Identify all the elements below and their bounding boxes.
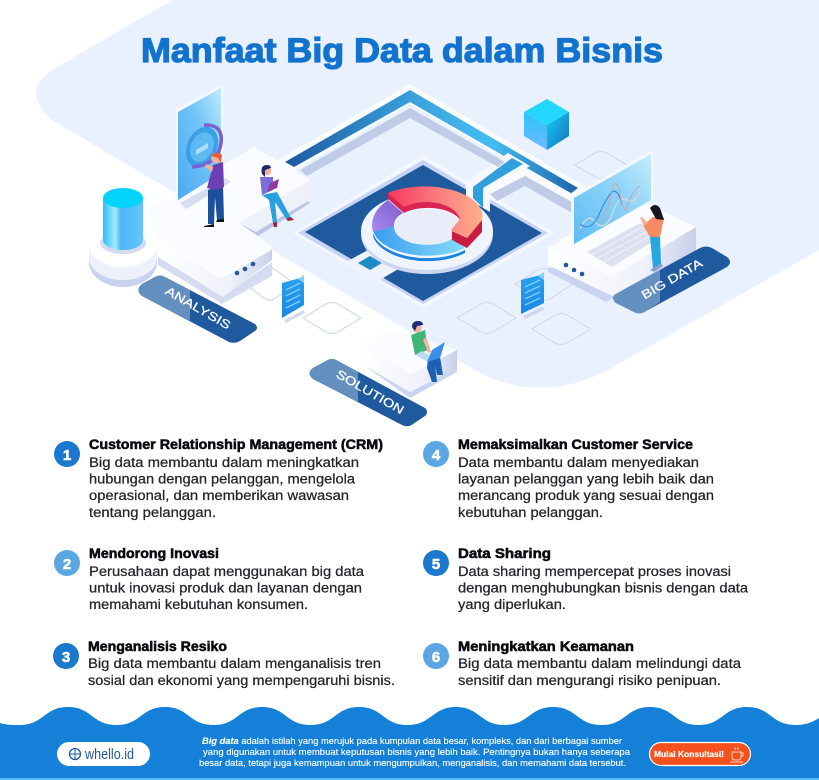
benefit 4 [423,436,714,520]
number badge 3 [53,643,79,669]
number badge 4: 4 [432,447,441,464]
benefit 3 text: Menganalisis Resiko [88,638,227,654]
isometric illustration [89,84,730,426]
label: big data: BIG DATA [639,256,705,302]
number badge 4 [423,441,449,467]
clipboard right [521,272,544,319]
benefit 2 text [89,545,365,612]
cube [524,99,569,150]
benefit 1 text [89,436,383,520]
footer description: besar data, tetapi juga kemampuan untuk mengumpulkan, menganalisis, dan memahami data tersebut. [199,758,626,768]
benefit 2 text: untuk inovasi produk dan layanan dengan [89,580,362,596]
benefit 4 text: Data membantu dalam menyediakan [458,455,699,470]
cylinder pedestal [89,188,157,287]
number badge 1 [54,441,80,467]
benefit 6 text [458,638,742,688]
benefit 3 text: sosial dan ekonomi yang mempengaruhi bisnis. [88,673,395,688]
benefit 4 text: layanan pelanggan yang lebih baik dan [458,472,714,486]
number badge 6: 6 [432,649,440,666]
left platform [147,147,310,304]
person seated with book [260,165,294,227]
number badge 1: 1 [63,447,71,464]
benefit 3 text [88,638,395,688]
benefit 6 text: Meningkatkan Keamanan [458,638,634,654]
number badge 2 [54,550,80,576]
benefit 5 [423,545,749,612]
holographic phone panel [176,85,231,209]
footer description: Big data adalah istilah yang merujuk pada kumpulan data besar, kompleks, dan dari berbagai sumber [202,736,622,746]
benefit 4 text: merancang produk yang sesuai dengan [458,488,714,503]
person standing with purple shirt [204,153,224,227]
laptop screen with chart [571,150,653,247]
footer description [199,736,630,768]
benefit 5 text: Data Sharing [458,545,551,561]
benefit 1 text: hubungan dengan pelanggan, mengelola [89,472,356,486]
label: solution [310,359,427,426]
benefit 6 text: sensitif dan mengurangi risiko penipuan. [458,673,721,688]
label: analysis: ANALYSIS [163,284,233,332]
benefit 2 text: Perusahaan dapat menggunakan big data [89,564,365,579]
benefit 1 text: operasional, dan memberikan wawasan [89,488,349,503]
footer [0,707,819,780]
background diamond panel [36,0,819,388]
number badge 5: 5 [432,556,440,573]
central dark blue diamond [293,155,555,308]
benefit 3 text: Big data membantu dalam menganalisis tren [88,656,381,671]
outline tiles [245,152,627,344]
number badge 5 [423,550,449,576]
benefit 5 text: dengan menghubungkan bisnis dengan data [458,580,749,596]
right laptop platform [548,195,696,302]
label: solution: SOLUTION [334,367,406,417]
label: analysis [138,276,257,343]
consult button: Mulai Konsultasi! [654,749,724,759]
benefit 1 text: Big data membantu dalam meningkatkan [89,455,359,470]
benefit 3 [53,638,395,688]
number badge 2: 2 [63,556,71,573]
benefit 1 text: tentang pelanggan. [89,505,216,520]
benefit 2 [54,545,365,612]
label: big data [613,246,730,313]
whello logo pill [57,742,150,766]
footer description: yang digunakan untuk membuat keputusan bisnis yang lebih baik. Pentingnya bukan hanya seberapa [203,747,630,757]
consult button [650,742,750,766]
solution platform [362,330,457,398]
title: Manfaat Big Data dalam Bisnis [141,32,663,70]
benefit 1 [54,436,383,520]
woman at laptop [640,205,664,272]
donut chart [361,186,493,274]
whello logo pill: whello.id [84,746,134,763]
wavy blue band [0,707,819,778]
circuit pipes [278,84,586,213]
benefit 4 text [458,436,714,520]
benefit 5 text [458,545,749,612]
benefit 2 text: Mendorong Inovasi [89,545,219,561]
benefit 5 text: yang diperlukan. [458,597,566,612]
benefit 4 text: kebutuhan pelanggan. [458,505,603,520]
benefit 4 text: Memaksimalkan Customer Service [458,436,693,452]
number badge 6 [423,643,449,669]
person with laptop [411,321,445,382]
benefit 1 text: Customer Relationship Management (CRM) [89,436,383,452]
clipboard left [282,275,305,323]
benefit 6 [423,638,742,688]
number badge 3: 3 [62,649,70,666]
benefit 5 text: Data sharing mempercepat proses inovasi [458,564,731,579]
benefit 2 text: memahami kebutuhan konsumen. [89,597,308,612]
benefit 6 text: Big data membantu dalam melindungi data [458,656,742,671]
